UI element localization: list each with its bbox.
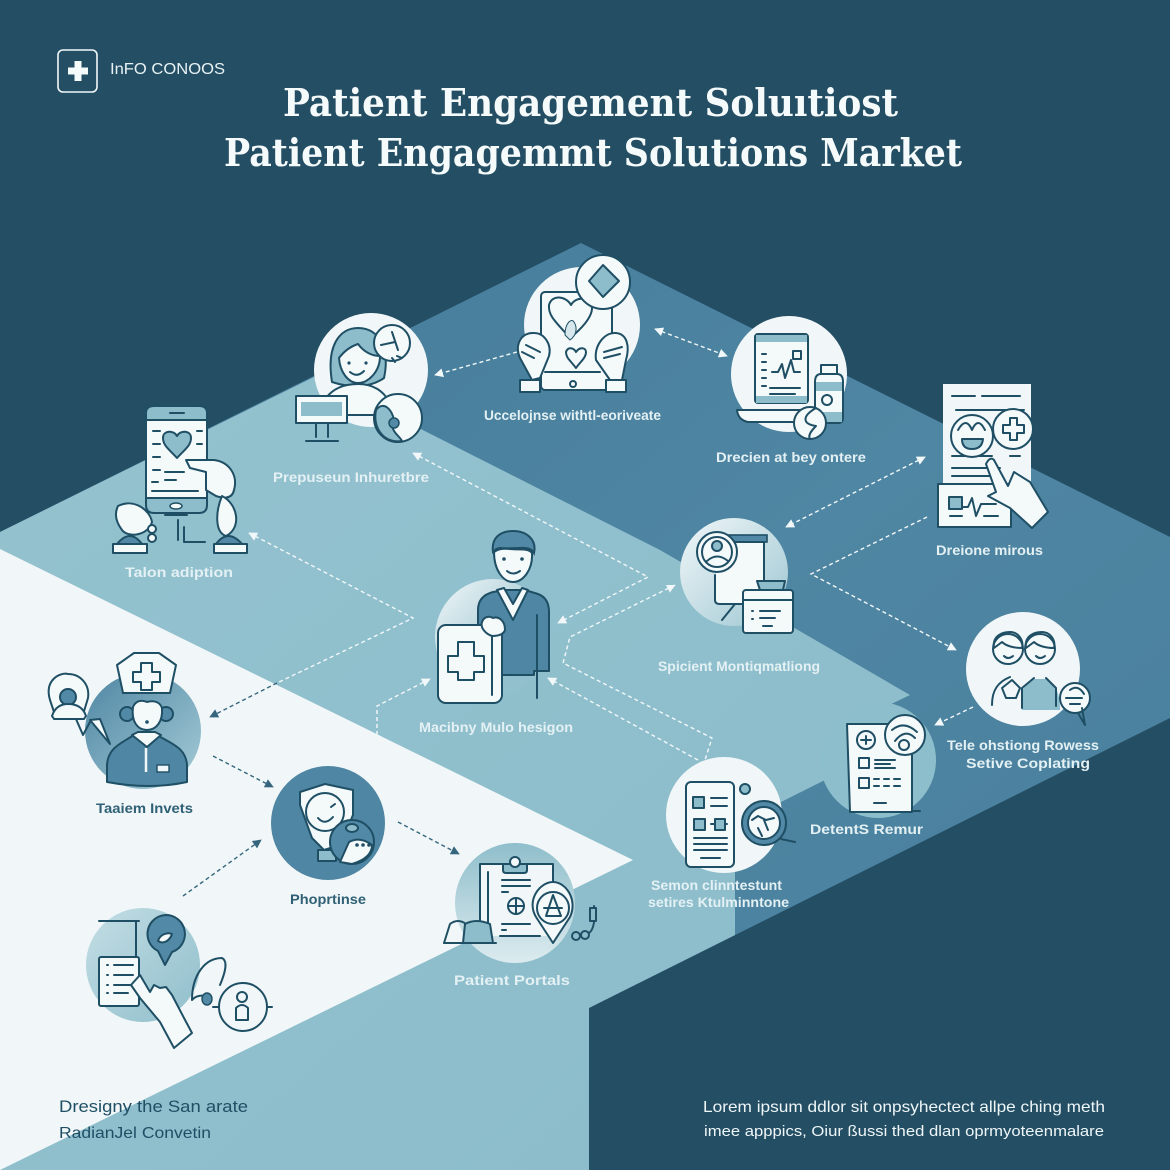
background: white isometric plane [0,549,633,1170]
logo text: InFO CONOOS [110,61,225,78]
label: tablet heart: Uccelojnse withtl-eoriveate [484,407,661,423]
icon: two consultants with bubble [966,612,1090,726]
label: consultants: Tele ohstiong Rowess [947,737,1099,753]
label: report: setires Ktulminntone [648,894,789,910]
background: light teal isometric plane [0,376,910,1170]
label: report: Semon clinntestunt [651,877,782,893]
label: survey: DetentS Remur [810,821,924,837]
label: document: Dreione mirous [936,542,1043,558]
title: Patient Engagemmt Solutions Market [224,130,962,175]
label: doctor: Macibny Mulo hesigon [419,719,573,735]
label: report [648,877,789,910]
icon: tablet with heart, bubble and hands [518,255,640,392]
icon: monitor with profile badge and card [680,518,793,633]
label: portal woman: Prepuseun Inhuretbre [273,469,429,485]
label: shield: Phoprtinse [290,891,366,907]
label: consultants [947,737,1099,771]
title: Patient Engagement Soluıtiost [283,80,898,125]
icon: shield face with chat bubble [271,766,385,880]
icon: mobile report with magnifier [666,757,795,873]
label: nurse: Taaiem Invets [96,800,193,816]
title [224,80,962,175]
footer note left [59,1097,248,1142]
icon: clipboard with pin and stethoscope [444,843,596,963]
label: monitoring: Spicient Montiqmatliong [658,658,820,674]
footer note left: RadianJel Convetin [59,1125,211,1142]
footer note left: Dresigny the San arate [59,1097,248,1116]
label: patient portals: Patient Portals [454,972,570,988]
icon: checklist with tapping hand and person [86,908,272,1048]
icon: survey document on teal circle [820,702,936,818]
icon: doctor with medical book [435,531,551,703]
label: phone chart: Drecien at bey ontere [716,449,866,465]
icon: phone chart with bottle [731,316,847,439]
connector arrows [183,329,973,896]
background: dark lower-right plane [589,718,1170,1170]
icon: nurse with cap and location bubble [49,653,201,789]
background: mid blue isometric plane [0,243,1170,1170]
icon: phone with heart and hands [113,406,247,553]
footer note right: Lorem ipsum ddlor sit onpsyhectect allpe ching meth [703,1099,1105,1116]
logo mark [58,50,97,92]
footer note right [703,1099,1105,1140]
icon: medical document with pointing hand [938,384,1048,528]
icon: portal woman with speech bubble and globe [296,313,428,442]
label: consultants: Setive Coplating [966,755,1090,771]
label: phone adoption: Talon adiption [125,564,233,580]
footer note right: imee apppics, Oiur ßussi thed dlan oprmyoteenmalare [704,1123,1104,1140]
